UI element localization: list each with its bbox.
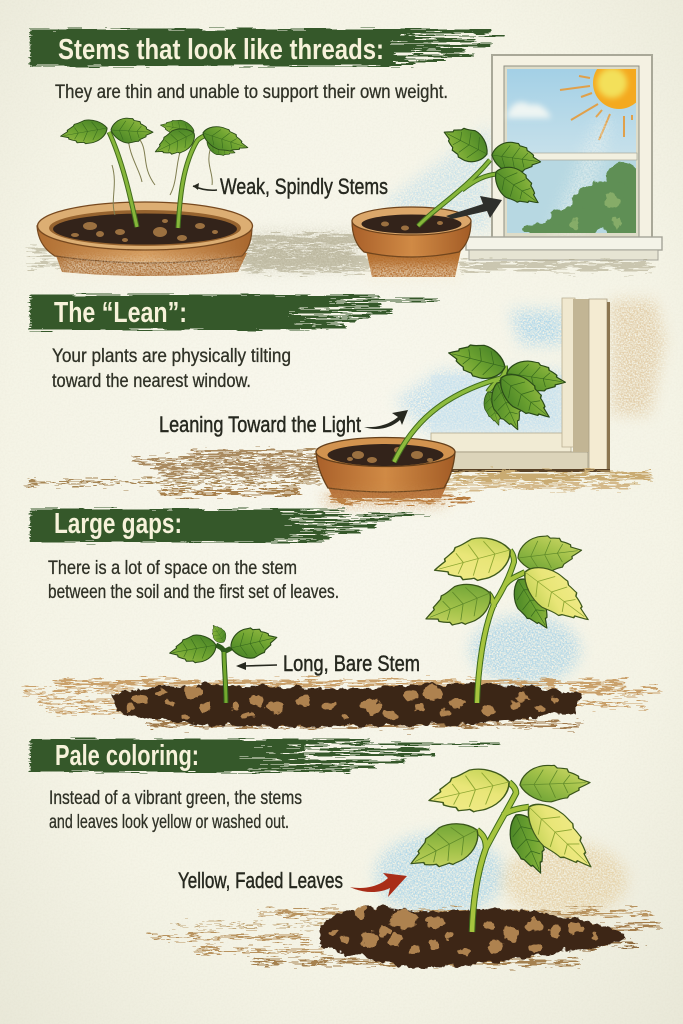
panel: large gaps	[25, 508, 660, 726]
description text	[49, 788, 302, 833]
heading: the lean	[30, 295, 440, 330]
panel: stems that look like threads	[28, 29, 662, 280]
heading: large gaps	[30, 508, 430, 542]
arrow and label: long, bare stem	[236, 651, 420, 676]
pale plant	[402, 762, 604, 932]
soil mound	[150, 907, 660, 968]
description text: There is a lot of space on the stem	[48, 558, 297, 579]
sun	[560, 69, 636, 140]
pot with leaning plant	[316, 438, 455, 504]
tree	[522, 162, 636, 233]
description text: They are thin and unable to support their own weight.	[55, 82, 448, 103]
pot: wide shallow pot with two seedlings	[37, 202, 252, 276]
arrow and label: long, bare stem: Long, Bare Stem	[283, 651, 420, 676]
arrow and label: yellow, faded leaves: Yellow, Faded Leaves	[178, 868, 343, 893]
blue light wash	[470, 615, 580, 685]
heading: pale coloring: Pale coloring:	[55, 740, 199, 772]
heading: stems that look like threads: Stems that look like threads:	[58, 34, 384, 66]
description text: toward the nearest window.	[52, 371, 251, 392]
panel: the lean	[26, 295, 665, 504]
seedling stems and leaves	[59, 117, 251, 228]
heading: pale coloring	[30, 739, 500, 772]
description text: Instead of a vibrant green, the stems	[49, 788, 302, 809]
soil strip	[25, 681, 660, 726]
ground brush strokes	[26, 451, 650, 502]
heading: the lean: The “Lean”:	[54, 297, 187, 329]
tall pale plant	[419, 530, 599, 703]
small seedling	[167, 622, 280, 703]
description text	[52, 346, 291, 392]
thread-like roots	[112, 134, 212, 215]
cloud	[507, 102, 551, 118]
description text: between the soil and the first set of leaves.	[48, 582, 339, 603]
window corner and light wash	[395, 298, 665, 472]
description text	[48, 558, 339, 603]
panel: pale coloring	[30, 739, 660, 968]
heading: large gaps: Large gaps:	[54, 508, 182, 540]
light wash	[375, 833, 627, 918]
arrow toward window	[446, 196, 502, 219]
arrow and label: leaning toward the light: Leaning Toward the Light	[159, 412, 361, 437]
description text: and leaves look yellow or washed out.	[49, 812, 289, 833]
leaning plant with leaves	[418, 119, 547, 226]
arrow and label: weak, spindly stems: Weak, Spindly Stems	[220, 174, 388, 199]
leaning plant stem and leaves	[394, 337, 568, 462]
description text: Your plants are physically tilting	[52, 346, 291, 367]
ground brush shadow	[28, 235, 650, 272]
window with sun and tree	[240, 55, 662, 270]
pot: small pot near window with leaning plant	[352, 207, 471, 280]
